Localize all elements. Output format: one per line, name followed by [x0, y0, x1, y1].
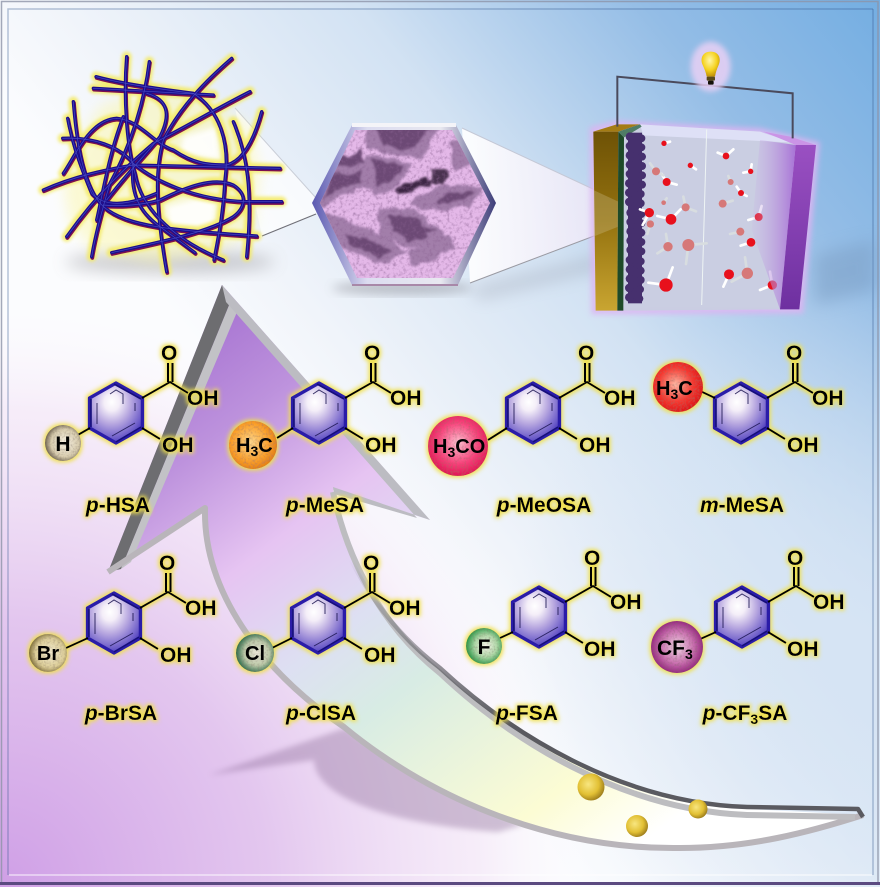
upper curve light band	[333, 492, 855, 817]
label p-FSA: p-FSA	[495, 702, 558, 725]
electrolyte compartment	[623, 124, 796, 311]
labels: OH	[160, 644, 192, 667]
labels: OH	[604, 387, 636, 410]
labels: OH	[162, 434, 194, 457]
substituent ball OCH3: 3	[447, 444, 455, 460]
labels: OH	[364, 644, 396, 667]
substituent ball H	[45, 425, 81, 461]
labels	[161, 342, 218, 457]
substituent ball CH3	[229, 421, 277, 469]
light bulb	[691, 42, 731, 92]
purple electrode	[752, 132, 816, 309]
label p-MeOSA: p-MeOSA	[496, 494, 591, 517]
molecule: p-ClSA	[236, 552, 420, 672]
upper curve dark edge	[335, 520, 863, 817]
substituent ball CF3: CF	[657, 637, 685, 660]
label p-CF3SA: p-CF	[703, 702, 750, 725]
purple active material layer	[625, 132, 646, 303]
labels	[364, 342, 422, 457]
substituent ball Cl: Cl	[245, 643, 265, 665]
label p-MeSA: p-MeSA	[285, 494, 364, 517]
labels	[786, 342, 844, 457]
polymer nanofiber network	[43, 57, 282, 273]
gold electrode	[593, 124, 640, 311]
label p-ClSA: p-ClSA	[285, 702, 356, 725]
shadows behind the upper illustrations	[65, 240, 875, 305]
molecule: m-MeSA	[653, 342, 844, 457]
labels: O	[159, 552, 175, 575]
green separator strip	[617, 124, 642, 311]
substituent ball F	[466, 628, 502, 664]
labels	[584, 547, 642, 661]
labels: O	[578, 342, 594, 365]
molecule: p-MeOSA	[428, 342, 636, 476]
labels: OH	[389, 597, 420, 620]
molecule: p-MeSA	[229, 342, 422, 469]
substituent ball CH3: C	[258, 435, 273, 457]
labels: OH	[579, 434, 610, 457]
labels: O	[786, 342, 802, 365]
label p-CF3SA: 3	[750, 711, 758, 727]
labels	[159, 552, 216, 667]
labels: OH	[365, 434, 396, 457]
labels	[787, 547, 844, 661]
gold sphere 2	[688, 800, 708, 818]
substituent ball OCH3: H	[433, 436, 447, 458]
projection wedge: hexagon to cell	[462, 128, 623, 283]
labels: OH	[187, 387, 218, 410]
water molecules	[640, 141, 777, 292]
electrochemical cell	[593, 42, 816, 311]
substituent ball H: H	[55, 433, 71, 456]
substituent ball CH3: H	[236, 435, 250, 457]
labels: OH	[584, 638, 616, 661]
arrowhead right edge	[222, 285, 430, 520]
gold sphere 3	[626, 815, 648, 837]
substituent ball OCH3	[428, 416, 488, 476]
substituent ball meta CH3: C	[678, 378, 693, 400]
molecule: p-HSA	[45, 342, 218, 461]
large curved arrow	[108, 285, 863, 848]
substituent ball Br: Br	[37, 643, 59, 665]
molecule: p-CF3SA	[651, 547, 844, 673]
labels	[578, 342, 636, 457]
labels: OH	[390, 387, 422, 410]
labels: OH	[787, 638, 818, 661]
labels: O	[364, 342, 380, 365]
substituent ball CH3: 3	[250, 443, 258, 459]
label p-CF3SA: SA	[758, 702, 787, 725]
substituent ball meta CH3: H	[656, 378, 670, 400]
substituent ball CF3: 3	[685, 646, 693, 662]
substituent ball CF3	[651, 621, 703, 673]
substituent ball OCH3: CO	[455, 436, 485, 458]
projection wedge: network to hexagon	[235, 108, 316, 236]
substituent ball Br	[29, 634, 67, 672]
substituent ball meta CH3: 3	[670, 386, 678, 402]
labels: O	[363, 552, 379, 575]
arrowhead dark edge	[108, 285, 232, 572]
labels: OH	[812, 387, 844, 410]
label p-BrSA: p-BrSA	[84, 702, 157, 725]
labels: OH	[610, 591, 642, 614]
labels: O	[161, 342, 177, 365]
network yellow halo	[43, 57, 282, 272]
labels	[363, 552, 420, 667]
molecule: p-FSA	[466, 547, 642, 664]
molecule: p-BrSA	[29, 552, 216, 672]
substituent ball F: F	[478, 636, 491, 659]
substituent ball meta CH3	[653, 362, 703, 412]
external wire	[617, 77, 793, 138]
cell purple glow	[593, 124, 816, 311]
gold sphere 1	[578, 774, 604, 800]
labels: OH	[787, 434, 818, 457]
labels: O	[787, 547, 803, 570]
labels: OH	[813, 591, 844, 614]
left notch edge	[108, 508, 863, 848]
labels: OH	[185, 597, 216, 620]
substituent ball Cl	[236, 634, 274, 672]
label m-MeSA: m-MeSA	[700, 494, 784, 517]
labels: O	[584, 547, 600, 570]
label p-HSA: p-HSA	[85, 494, 150, 517]
arrowhead light edge	[121, 298, 237, 569]
SEM image hexagon	[312, 118, 496, 285]
arrow shadow	[209, 728, 523, 832]
